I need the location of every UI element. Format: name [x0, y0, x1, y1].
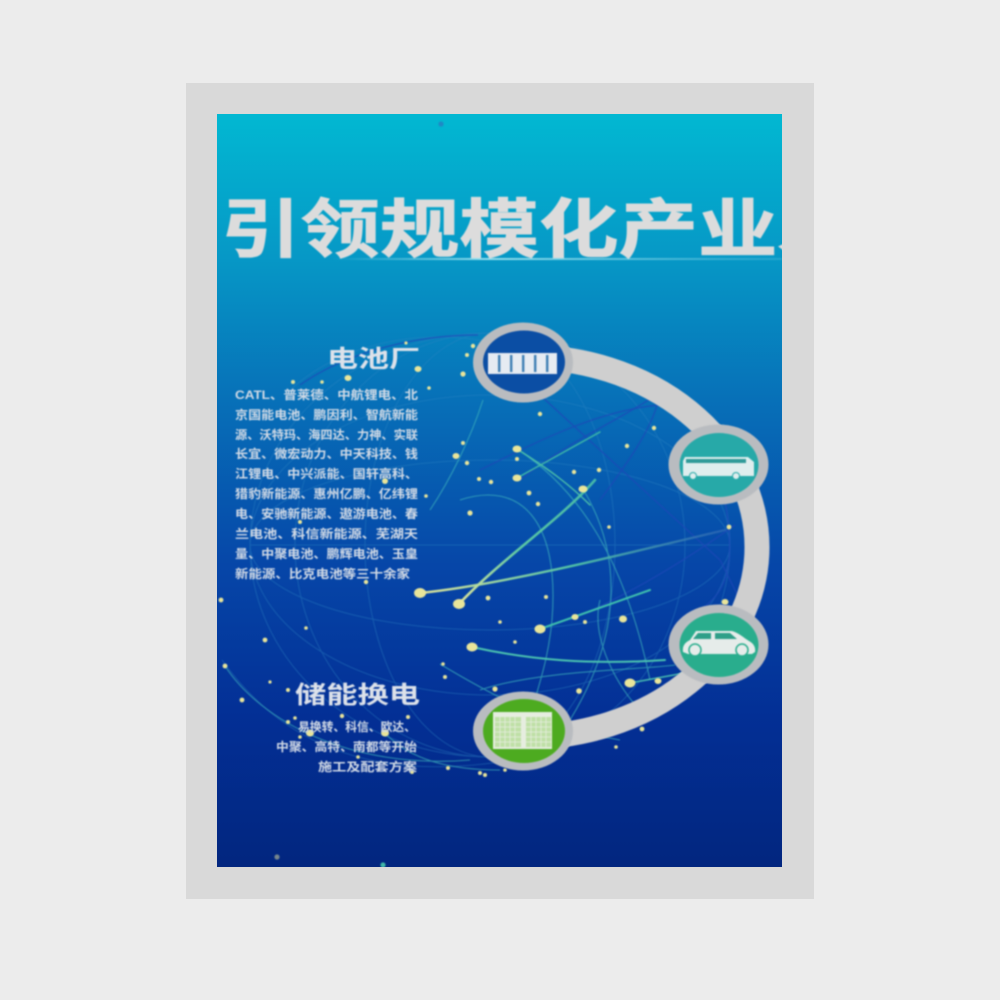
highlighted streaks — [420, 432, 725, 683]
poster panel — [217, 114, 782, 867]
text block: storage and swap list — [276, 719, 417, 774]
network globe — [222, 333, 740, 770]
heading: battery factories: 电池厂 — [327, 346, 420, 373]
text block: storage and swap list: 易换转、科信、欧达、 — [298, 719, 416, 734]
title: 引领规模化产业发 — [221, 194, 857, 266]
text block: battery factory list: 京国能电池、鹏因利、智航新能 — [235, 407, 418, 422]
node: battery pack — [473, 322, 573, 402]
text block: battery factory list: CATL、普莱德、中航锂电、北 — [235, 387, 418, 402]
text block: battery factory list: 量、中聚电池、鹏辉电池、玉皇 — [235, 546, 418, 561]
connecting arc — [523, 357, 757, 737]
node: bus — [668, 424, 768, 504]
text block: battery factory list: 猎豹新能源、惠州亿鹏、亿纬锂 — [235, 486, 418, 501]
text block: battery factory list — [235, 387, 418, 581]
node: solar panels — [473, 692, 573, 770]
text block: battery factory list: 江锂电、中兴派能、国轩高科、 — [235, 466, 418, 481]
text block: battery factory list: 长宜、微宏动力、中天科技、钱 — [235, 446, 418, 461]
node: car — [668, 604, 768, 684]
text block: storage and swap list: 中聚、高特、南都等开始 — [276, 739, 417, 754]
text block: battery factory list: 兰电池、科信新能源、芜湖天 — [235, 526, 418, 541]
star dots — [219, 121, 731, 868]
text block: battery factory list: 新能源、比克电池等三十余家 — [235, 566, 410, 581]
heading: storage and battery swap: 储能换电 — [295, 682, 420, 709]
text block: storage and swap list: 施工及配套方案 — [318, 759, 417, 774]
outer frame — [186, 83, 814, 899]
text block: battery factory list: 电、安驰新能源、遨游电池、春 — [235, 506, 418, 521]
text block: battery factory list: 源、沃特玛、海四达、力神、实联 — [235, 427, 418, 442]
